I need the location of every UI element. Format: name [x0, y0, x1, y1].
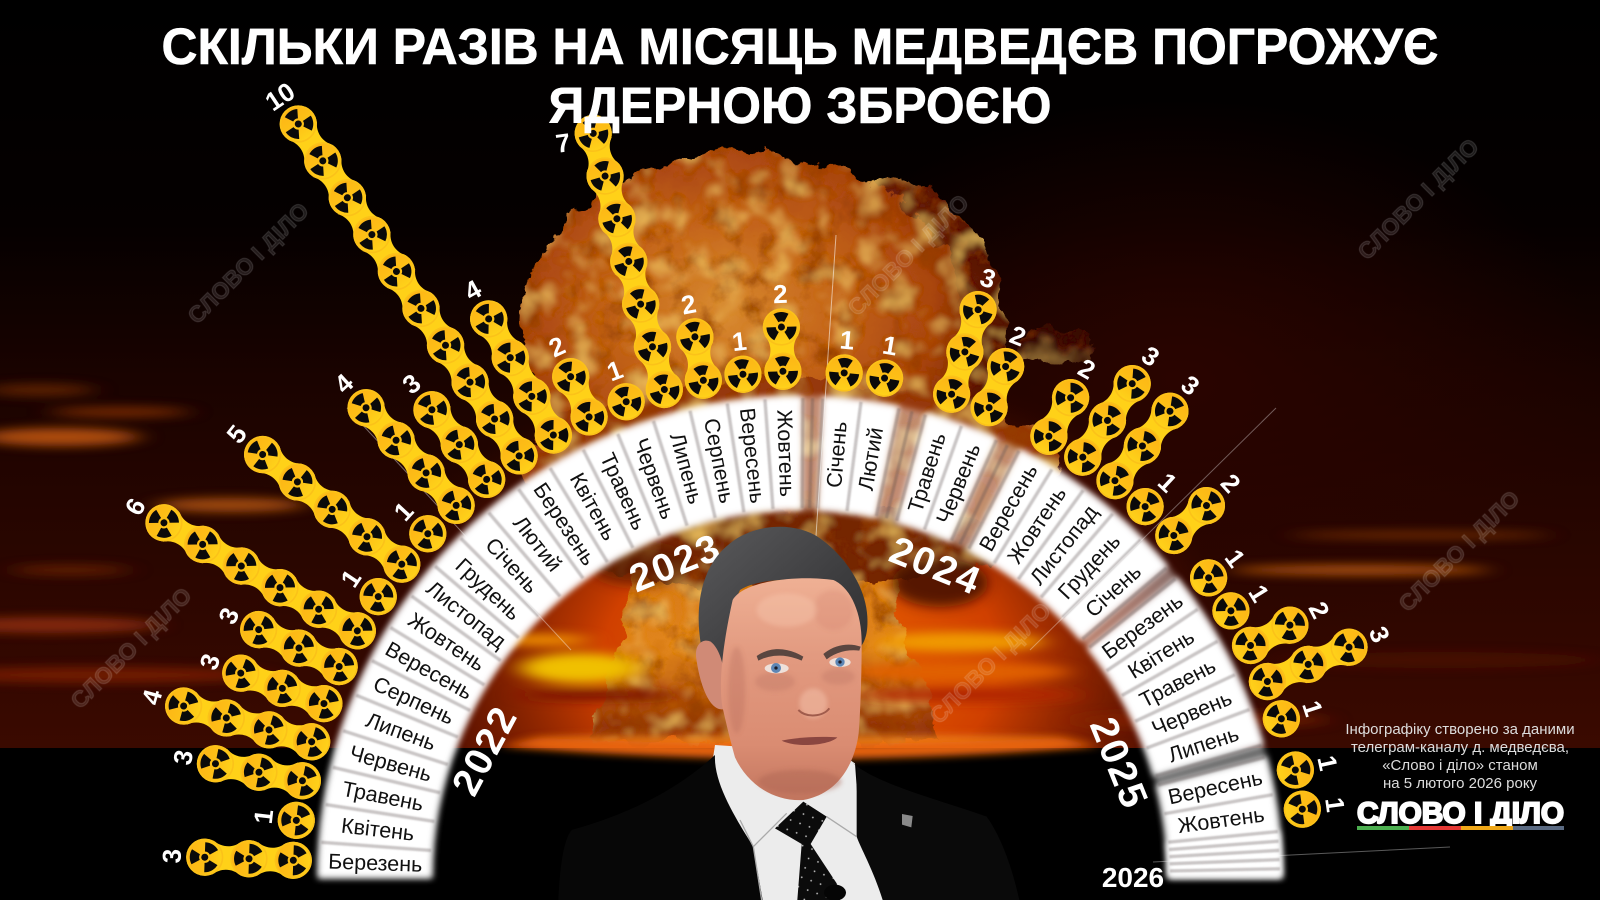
- Лютий 2023: 3: [388, 361, 513, 506]
- month labels: Лютий: [508, 511, 566, 576]
- Червень 2022: 4: [132, 675, 335, 765]
- Вересень 2025: 1: [1273, 742, 1346, 792]
- year labels: 2025: [1081, 712, 1156, 816]
- eyes: [765, 657, 851, 673]
- Жовтень 2025: 1: [1281, 784, 1352, 830]
- Січень 2023: 4: [320, 360, 482, 532]
- nose: [798, 708, 829, 715]
- suit jacket right: [852, 762, 1019, 900]
- month labels: Березень: [1097, 589, 1188, 664]
- arch base: translucent fading band: [375, 453, 1225, 878]
- Квітень 2022: 1: 1: [248, 808, 279, 825]
- Липень 2025: 1: 1: [1296, 697, 1329, 720]
- Квітень 2023: 4: [449, 268, 579, 460]
- month labels: Вересень: [1166, 766, 1265, 809]
- Березень 2025: 1: 1: [1219, 544, 1252, 573]
- dark blotches under the arch: [590, 545, 988, 607]
- Жовтень 2025: 1: 1: [1319, 796, 1351, 814]
- Березень 2022: 3: 3: [157, 848, 187, 864]
- month labels: Травень: [595, 449, 651, 534]
- source note: на 5 лютого 2026 року: [1383, 775, 1538, 792]
- title: [162, 18, 1438, 134]
- watermarks: [65, 133, 1525, 729]
- Грудень 2024: 1: [1119, 459, 1191, 533]
- title: ЯДЕРНОЮ ЗБРОЄЮ: [548, 77, 1052, 134]
- month labels: Березень: [328, 850, 423, 877]
- Вересень 2024: 2: [1024, 347, 1110, 462]
- Серпень 2023: 2: [667, 286, 725, 402]
- month labels: Травень: [340, 777, 425, 816]
- Травень 2024: 3: [928, 258, 1010, 418]
- Травень 2023: 2: [534, 325, 614, 442]
- year labels: 2023: [624, 526, 728, 601]
- year labels: 2026: [1102, 862, 1164, 893]
- face: [721, 578, 862, 800]
- Листопад 2024: 3: 3: [1175, 369, 1205, 402]
- tie: [775, 802, 840, 900]
- watermarks: СЛОВО І ДІЛО: [842, 189, 974, 321]
- month labels: Травень: [1136, 654, 1220, 713]
- Березень 2022: 3: [156, 837, 313, 880]
- hair: [699, 527, 867, 677]
- Серпень 2022: 3: 3: [212, 603, 245, 629]
- month labels: Лютий: [854, 426, 888, 492]
- Травень 2022: 3: [165, 736, 324, 803]
- portrait of Medvedev: [558, 527, 1019, 900]
- watermarks: СЛОВО І ДІЛО: [924, 597, 1056, 729]
- Жовтень 2022: 1: [328, 555, 404, 622]
- month labels: Квітень: [565, 469, 622, 545]
- Березень 2023: 10: [256, 74, 545, 482]
- Січень 2025: 2: 2: [1215, 468, 1247, 499]
- microphone: [824, 885, 846, 900]
- Грудень 2024: 1: 1: [1152, 467, 1183, 498]
- Вересень 2022: 6: [113, 483, 383, 656]
- count for Липень 2023: 7: 7: [554, 127, 572, 159]
- month labels: Січень: [480, 533, 543, 598]
- Травень 2025: 2: [1225, 587, 1341, 671]
- month labels: Вересень: [735, 407, 770, 505]
- month labels: Квітень: [1124, 625, 1199, 684]
- Липень 2022: 3: 3: [193, 650, 226, 674]
- month labels: [328, 407, 1266, 877]
- logo: Слово і діло: СЛОВО І ДІЛО: [1357, 797, 1564, 830]
- maroon haze on the upper right: [760, 100, 1600, 660]
- Березень 2023: 10: 10: [260, 76, 300, 117]
- month labels: Січень: [822, 420, 852, 489]
- lapel pin: [902, 814, 913, 827]
- Травень 2024: 3: 3: [977, 262, 999, 295]
- month labels: Травень: [903, 430, 951, 515]
- year labels: [444, 526, 1164, 893]
- watermarks: СЛОВО І ДІЛО: [1393, 485, 1525, 617]
- month labels: Червень: [629, 435, 680, 523]
- Грудень 2022: 1: [380, 487, 454, 560]
- source note: телеграм-каналу д. медведєва,: [1351, 739, 1569, 756]
- Грудень 2022: 1: 1: [388, 496, 420, 527]
- Червень 2024: 2: 2: [1006, 319, 1030, 352]
- collar shadows: [740, 813, 857, 900]
- suit jacket left: [558, 755, 763, 900]
- source note: Інфографіку створено за даними: [1345, 721, 1575, 738]
- month labels: Липень: [665, 430, 708, 507]
- month labels: Серпень: [370, 672, 458, 730]
- Червень 2023: 1: 1: [603, 354, 627, 387]
- Серпень 2023: 2: 2: [679, 288, 699, 321]
- Травень 2022: 3: 3: [167, 747, 199, 767]
- Лютий 2023: 3: 3: [397, 368, 426, 400]
- Жовтень 2022: 1: 1: [334, 564, 367, 593]
- Червень 2025: 3: 3: [1363, 622, 1396, 647]
- Лютий 2024: 1: [863, 328, 911, 400]
- year labels: 2024: [883, 529, 987, 604]
- facial shading: [728, 590, 855, 794]
- arch of months: [321, 398, 1280, 878]
- Жовтень 2024: 3: 3: [1136, 340, 1165, 373]
- watermarks: СЛОВО І ДІЛО: [1352, 133, 1484, 265]
- month labels: Грудень: [1053, 529, 1125, 604]
- Лютий 2024: 1: 1: [880, 330, 900, 362]
- Квітень 2023: 4: 4: [459, 273, 487, 307]
- month labels: Грудень: [451, 554, 525, 625]
- Жовтень 2024: 3: [1057, 333, 1174, 483]
- source note: «Слово і діло» станом: [1382, 757, 1538, 774]
- Січень 2024: 1: 1: [839, 324, 856, 356]
- month labels: Квітень: [340, 814, 416, 846]
- Липень 2022: 3: [189, 639, 348, 727]
- month labels: Жовтень: [772, 409, 799, 497]
- Червень 2022: 4: 4: [135, 686, 168, 708]
- Листопад 2022: 5: [213, 410, 428, 590]
- month labels: Листопад: [1025, 500, 1103, 589]
- month labels: Жовтень: [404, 608, 489, 676]
- month labels: Березень: [528, 478, 601, 570]
- Березень 2025: 1: [1183, 534, 1258, 604]
- Липень 2025: 1: [1258, 686, 1333, 742]
- Вересень 2025: 1: 1: [1311, 753, 1344, 773]
- Липень 2023: 7 chain: [570, 110, 687, 412]
- Жовтень 2023: 2: [761, 278, 802, 391]
- Серпень 2022: 3: [207, 593, 364, 691]
- Січень 2025: 2: [1148, 459, 1254, 562]
- eyebrows: [757, 649, 803, 661]
- shirt: [712, 745, 883, 900]
- Січень 2024: 1: [824, 323, 867, 393]
- chart: radiation-symbol chains per month: [113, 74, 1401, 880]
- month labels: Вересень: [381, 637, 477, 705]
- Квітень 2025: 1: 1: [1242, 579, 1276, 607]
- cloud streaks: [0, 384, 1600, 728]
- glint lines: [347, 235, 1450, 862]
- mouth: [782, 737, 837, 745]
- Червень 2023: 1: [592, 350, 650, 426]
- month labels: Вересень: [975, 460, 1043, 555]
- year labels: 2022: [444, 699, 527, 803]
- Листопад 2024: 3: [1089, 362, 1214, 507]
- Червень 2025: 3: [1243, 611, 1401, 706]
- inner glow behind the mushroom: [300, 300, 1300, 760]
- Червень 2024: 2: [965, 315, 1041, 432]
- Вересень 2024: 2: 2: [1073, 352, 1101, 386]
- Травень 2025: 2: 2: [1303, 597, 1336, 623]
- ear: [696, 641, 725, 709]
- month labels: Жовтень: [1003, 482, 1071, 568]
- month labels: Серпень: [699, 416, 739, 505]
- month labels: Жовтень: [1176, 803, 1266, 838]
- month labels: Липень: [363, 708, 439, 756]
- Січень 2023: 4: 4: [328, 367, 360, 399]
- watermarks: СЛОВО І ДІЛО: [182, 197, 314, 329]
- yellow glow streaks inside the arch: [490, 632, 1080, 748]
- horizon fire line: [500, 738, 1100, 759]
- dark ground: [0, 748, 1600, 900]
- Жовтень 2023: 2: 2: [773, 279, 788, 309]
- mushroom cap: [520, 153, 1095, 587]
- month labels: Червень: [347, 741, 435, 787]
- Вересень 2023: 1: [719, 324, 764, 395]
- month labels: Листопад: [422, 576, 511, 654]
- arch: solid white slices for months with threats: [375, 453, 1225, 878]
- Листопад 2022: 5: 5: [220, 419, 253, 449]
- Вересень 2023: 1: 1: [730, 326, 748, 357]
- month labels: Січень: [1081, 560, 1146, 622]
- Квітень 2025: 1: [1205, 570, 1281, 636]
- month labels: Червень: [932, 440, 985, 527]
- arch end stripes: [375, 453, 1225, 878]
- watermarks: СЛОВО І ДІЛО: [65, 582, 197, 714]
- month labels: Липень: [1165, 722, 1242, 767]
- Травень 2023: 2: 2: [544, 330, 570, 363]
- Вересень 2022: 6: 6: [119, 493, 152, 520]
- title: СКІЛЬКИ РАЗІВ НА МІСЯЦЬ МЕДВЕДЄВ ПОГРОЖУЄ: [162, 18, 1438, 75]
- source note: [1345, 721, 1575, 792]
- month labels: Червень: [1148, 686, 1235, 741]
- Квітень 2022: 1: [246, 796, 317, 841]
- mushroom stem: [585, 500, 940, 742]
